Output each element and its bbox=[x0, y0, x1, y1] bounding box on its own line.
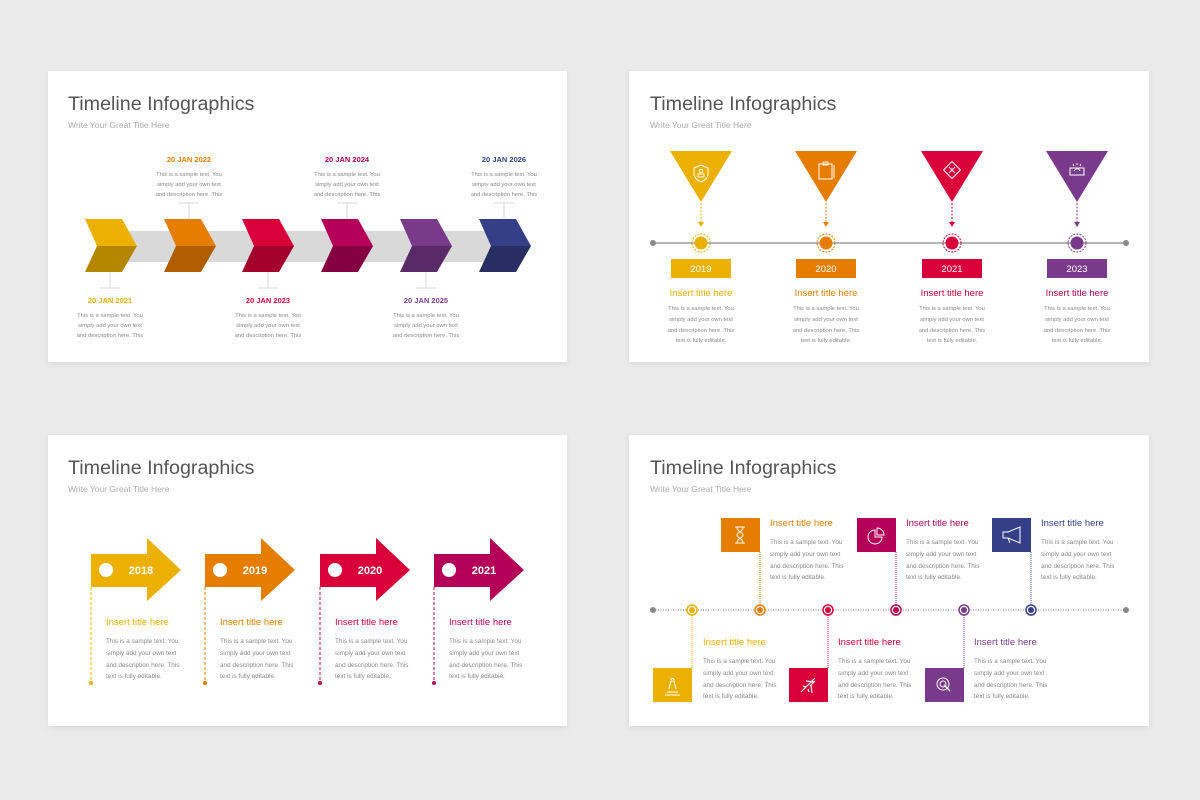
axis line bbox=[650, 240, 1129, 246]
label 2021 bbox=[77, 272, 143, 339]
item red (bottom) bbox=[789, 605, 911, 702]
arrow 2021: text is fully editable. bbox=[449, 673, 505, 680]
milestone 2019: Insert title here bbox=[670, 288, 732, 299]
label 2023 bbox=[235, 272, 301, 339]
milestone 2020: 2020 bbox=[815, 264, 837, 275]
arrow 2018: Insert title here bbox=[106, 617, 169, 628]
arrow 2020: and description here. This bbox=[335, 662, 408, 669]
item navy (top): This is a sample text. You bbox=[1041, 539, 1114, 546]
milestone 2020: text is fully editable. bbox=[801, 338, 852, 344]
label 2022: and description here. This bbox=[156, 192, 222, 198]
label 2025: This is a sample text. You bbox=[393, 313, 459, 319]
title: Timeline Infographics bbox=[650, 457, 837, 479]
item yellow (bottom): and description here. This bbox=[703, 682, 776, 689]
label 2022 bbox=[156, 155, 222, 219]
milestone 2023: simply add your own text bbox=[1045, 317, 1109, 323]
label 2024: and description here. This bbox=[314, 192, 380, 198]
milestone 2019: simply add your own text bbox=[669, 317, 733, 323]
arrow 2018: simply add your own text bbox=[106, 650, 177, 657]
milestone 2019: text is fully editable. bbox=[676, 338, 727, 344]
item navy (top) bbox=[992, 518, 1114, 615]
label 2021: simply add your own text bbox=[78, 323, 142, 329]
item yellow (bottom): simply add your own text bbox=[703, 670, 774, 677]
label 2024 bbox=[314, 155, 380, 219]
arrow 2018: text is fully editable. bbox=[106, 673, 162, 680]
arrow 2020: 2020 bbox=[358, 565, 382, 577]
item orange (top): Insert title here bbox=[770, 518, 833, 529]
label 2026: This is a sample text. You bbox=[471, 172, 537, 178]
arrow 2018: 2018 bbox=[129, 565, 153, 577]
label 2025: simply add your own text bbox=[394, 323, 458, 329]
label 2022: This is a sample text. You bbox=[156, 172, 222, 178]
item navy (top): text is fully editable. bbox=[1041, 574, 1097, 581]
panel: icon box timeline bbox=[629, 435, 1149, 726]
label 2021: This is a sample text. You bbox=[77, 313, 143, 319]
milestone 2021: Insert title here bbox=[921, 288, 983, 299]
chevron 2 bbox=[164, 219, 216, 272]
item navy (top): simply add your own text bbox=[1041, 551, 1112, 558]
arrow 2018: and description here. This bbox=[106, 662, 179, 669]
gray band bbox=[105, 231, 500, 262]
item red (bottom): Insert title here bbox=[838, 637, 901, 648]
arrow 2020: Insert title here bbox=[335, 617, 398, 628]
arrow 2019: text is fully editable. bbox=[220, 673, 276, 680]
item orange (top): and description here. This bbox=[770, 563, 843, 570]
milestone 2020 bbox=[793, 151, 859, 344]
item orange (top): This is a sample text. You bbox=[770, 539, 843, 546]
item magenta (top): This is a sample text. You bbox=[906, 539, 979, 546]
dotted axis bbox=[650, 607, 1129, 613]
subtitle: Write Your Great Title Here bbox=[68, 120, 170, 130]
title: Timeline Infographics bbox=[650, 93, 837, 115]
label 2024: 20 JAN 2024 bbox=[325, 155, 370, 164]
label 2026: simply add your own text bbox=[472, 182, 536, 188]
label 2024: simply add your own text bbox=[315, 182, 379, 188]
item magenta (top): text is fully editable. bbox=[906, 574, 962, 581]
arrow 2020: This is a sample text. You bbox=[335, 638, 408, 645]
label 2022: 20 JAN 2022 bbox=[167, 155, 211, 164]
milestone 2023: This is a sample text. You bbox=[1044, 306, 1110, 312]
milestone 2020: This is a sample text. You bbox=[793, 306, 859, 312]
arrow 2021: 2021 bbox=[472, 565, 496, 577]
milestone 2023: and description here. This bbox=[1044, 328, 1110, 334]
arrow 2020: text is fully editable. bbox=[335, 673, 391, 680]
item navy (top): Insert title here bbox=[1041, 518, 1104, 529]
label 2022: simply add your own text bbox=[157, 182, 221, 188]
milestone 2019: 2019 bbox=[690, 264, 712, 275]
milestone 2020: simply add your own text bbox=[794, 317, 858, 323]
milestone 2023: text is fully editable. bbox=[1052, 338, 1103, 344]
panel: arrow timeline bbox=[48, 435, 567, 726]
label 2025 bbox=[393, 272, 459, 339]
item orange (top) bbox=[721, 518, 843, 615]
title: Timeline Infographics bbox=[68, 93, 255, 115]
label 2026: 20 JAN 2026 bbox=[482, 155, 526, 164]
item purple (bottom): Insert title here bbox=[974, 637, 1037, 648]
title: Timeline Infographics bbox=[68, 457, 255, 479]
item navy (top): and description here. This bbox=[1041, 563, 1114, 570]
milestone 2023: Insert title here bbox=[1046, 288, 1108, 299]
arrow 2020 bbox=[318, 538, 410, 685]
item magenta (top): Insert title here bbox=[906, 518, 969, 529]
label 2023: and description here. This bbox=[235, 333, 301, 339]
item red (bottom): text is fully editable. bbox=[838, 693, 894, 700]
item orange (top): text is fully editable. bbox=[770, 574, 826, 581]
milestone 2019 bbox=[668, 151, 734, 344]
chevron 1 bbox=[85, 219, 137, 272]
label 2025: and description here. This bbox=[393, 333, 459, 339]
arrow 2019: and description here. This bbox=[220, 662, 293, 669]
item red (bottom): This is a sample text. You bbox=[838, 658, 911, 665]
label 2026: and description here. This bbox=[471, 192, 537, 198]
milestone 2020: and description here. This bbox=[793, 328, 859, 334]
label 2025: 20 JAN 2025 bbox=[404, 296, 448, 305]
milestone 2021 bbox=[919, 151, 985, 344]
label 2024: This is a sample text. You bbox=[314, 172, 380, 178]
arrow 2019: simply add your own text bbox=[220, 650, 291, 657]
item yellow (bottom): Insert title here bbox=[703, 637, 766, 648]
arrow 2018: This is a sample text. You bbox=[106, 638, 179, 645]
chevron 6 bbox=[479, 219, 531, 272]
item purple (bottom): and description here. This bbox=[974, 682, 1047, 689]
chevron 5 bbox=[400, 219, 452, 272]
arrow 2021: and description here. This bbox=[449, 662, 522, 669]
milestone 2021: This is a sample text. You bbox=[919, 306, 985, 312]
label 2021: and description here. This bbox=[77, 333, 143, 339]
item purple (bottom): simply add your own text bbox=[974, 670, 1045, 677]
arrow 2019: This is a sample text. You bbox=[220, 638, 293, 645]
arrow 2019 bbox=[203, 538, 295, 685]
item magenta (top) bbox=[857, 518, 979, 615]
item yellow (bottom) bbox=[653, 605, 776, 702]
item magenta (top): and description here. This bbox=[906, 563, 979, 570]
milestone 2021: 2021 bbox=[941, 264, 963, 275]
item purple (bottom): This is a sample text. You bbox=[974, 658, 1047, 665]
item yellow (bottom): text is fully editable. bbox=[703, 693, 759, 700]
item magenta (top): simply add your own text bbox=[906, 551, 977, 558]
arrow 2021: simply add your own text bbox=[449, 650, 520, 657]
milestone 2020: Insert title here bbox=[795, 288, 857, 299]
subtitle: Write Your Great Title Here bbox=[650, 120, 752, 130]
chevron 3 bbox=[242, 219, 294, 272]
milestone 2023 bbox=[1044, 151, 1110, 344]
arrow 2019: Insert title here bbox=[220, 617, 283, 628]
subtitle: Write Your Great Title Here bbox=[650, 484, 752, 494]
arrow 2021: This is a sample text. You bbox=[449, 638, 522, 645]
item orange (top): simply add your own text bbox=[770, 551, 841, 558]
milestone 2023: 2023 bbox=[1066, 264, 1088, 275]
label 2023: This is a sample text. You bbox=[235, 313, 301, 319]
milestone 2021: and description here. This bbox=[919, 328, 985, 334]
subtitle: Write Your Great Title Here bbox=[68, 484, 170, 494]
milestone 2021: simply add your own text bbox=[920, 317, 984, 323]
arrow 2020: simply add your own text bbox=[335, 650, 406, 657]
label 2026 bbox=[471, 155, 537, 219]
arrow 2019: 2019 bbox=[243, 565, 267, 577]
panel: triangle timeline bbox=[629, 71, 1149, 362]
item yellow (bottom): This is a sample text. You bbox=[703, 658, 776, 665]
milestone 2019: and description here. This bbox=[668, 328, 734, 334]
arrow 2021: Insert title here bbox=[449, 617, 512, 628]
chevron 4 bbox=[321, 219, 373, 272]
item red (bottom): and description here. This bbox=[838, 682, 911, 689]
label 2021: 20 JAN 2021 bbox=[88, 296, 132, 305]
arrow 2018 bbox=[89, 538, 181, 685]
milestone 2019: This is a sample text. You bbox=[668, 306, 734, 312]
item purple (bottom): text is fully editable. bbox=[974, 693, 1030, 700]
panel: chevron timeline bbox=[48, 71, 567, 362]
milestone 2021: text is fully editable. bbox=[927, 338, 978, 344]
arrow 2021 bbox=[432, 538, 524, 685]
label 2023: 20 JAN 2023 bbox=[246, 296, 290, 305]
label 2023: simply add your own text bbox=[236, 323, 300, 329]
item red (bottom): simply add your own text bbox=[838, 670, 909, 677]
item purple (bottom) bbox=[925, 605, 1047, 702]
